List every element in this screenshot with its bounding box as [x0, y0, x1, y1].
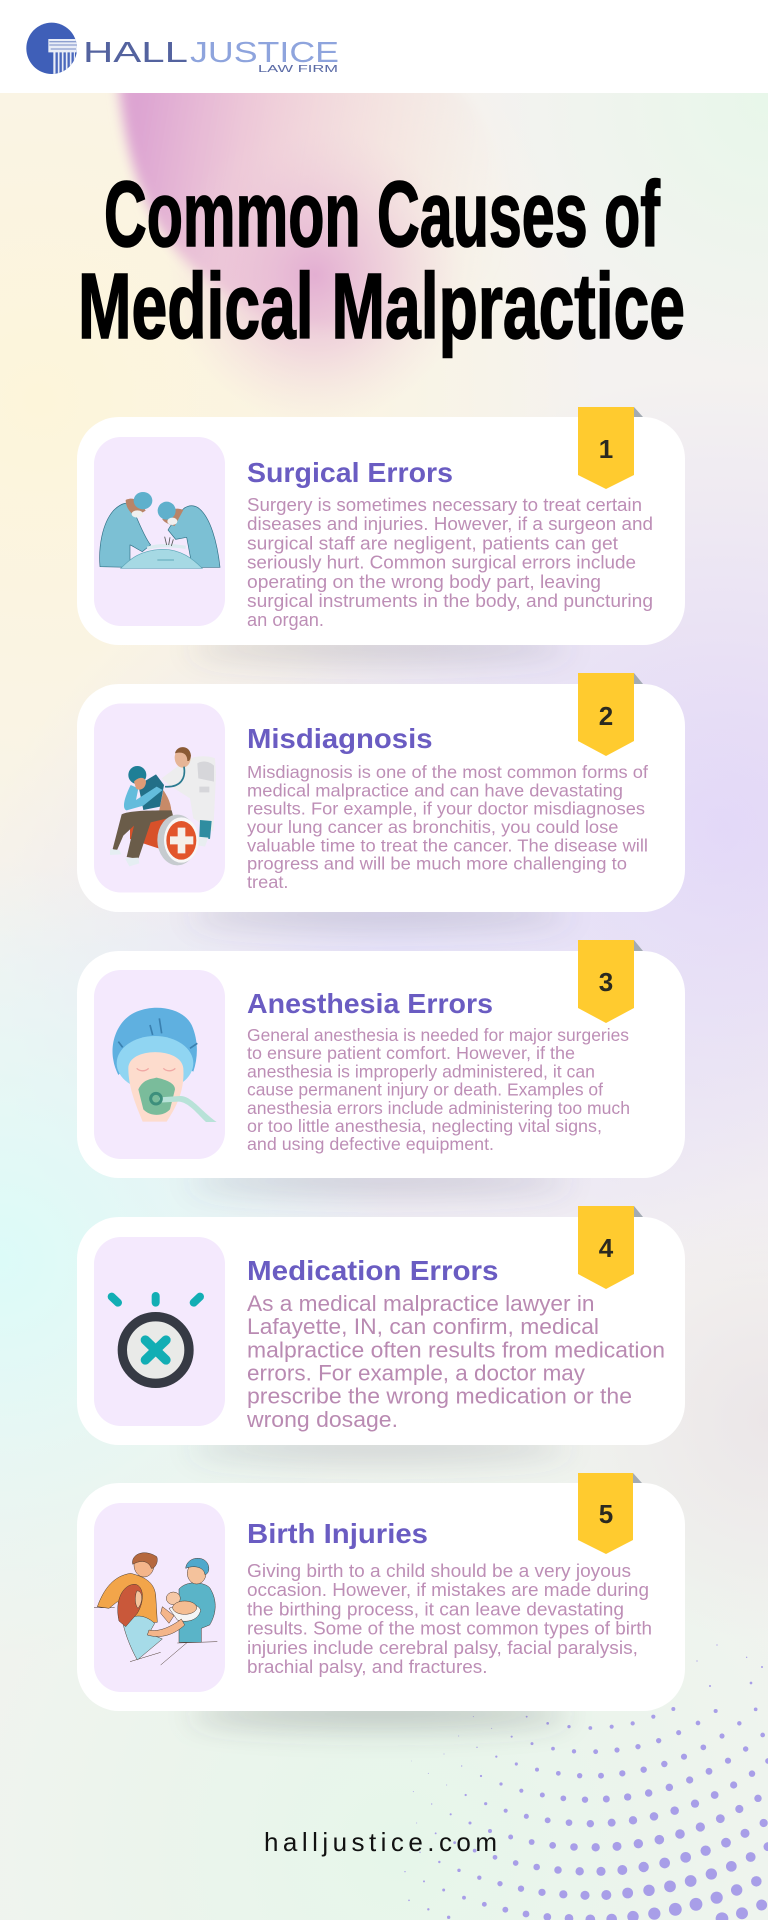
logo: [26, 23, 339, 75]
body text: results. For example, if your doctor misdiagnoses: [247, 799, 645, 819]
number ribbon 2: [578, 673, 643, 756]
body text: Surgery is sometimes necessary to treat certain: [247, 495, 642, 515]
body text: wrong dosage.: [246, 1407, 398, 1432]
body text: the birthing process, it can leave devastating: [247, 1599, 624, 1619]
footer website url: halljustice.com: [264, 1827, 497, 1857]
icon: patient with anesthesia mask: [113, 1008, 217, 1122]
section heading: Misdiagnosis: [247, 723, 432, 754]
number ribbon 5: [578, 1473, 642, 1554]
body text: [247, 1025, 630, 1154]
number ribbon 1: [578, 407, 643, 489]
number ribbon 3: 3: [599, 967, 613, 997]
body text: cause permanent injury or death. Examples of: [247, 1080, 603, 1100]
number ribbon 2: 2: [599, 701, 613, 731]
body text: errors. For example, a doctor may: [247, 1361, 585, 1386]
body text: medical malpractice and can have devastating: [247, 780, 623, 800]
body text: General anesthesia is needed for major surgeries: [247, 1025, 629, 1045]
body text: [246, 1291, 665, 1432]
section heading: Surgical Errors: [247, 457, 453, 488]
section heading: Birth Injuries: [247, 1518, 428, 1549]
icon: doctor examining patient: [110, 747, 216, 866]
body text: prescribe the wrong medication or the: [247, 1384, 632, 1409]
card 1: surgical errors: [77, 407, 685, 662]
body text: results. Some of the most common types of birth: [247, 1619, 652, 1639]
icon: parents and nurse with newborn: [94, 1553, 217, 1665]
body text: your lung cancer as bronchitis, you could lose: [247, 817, 618, 837]
body text: injuries include cerebral palsy, facial paralysis,: [247, 1638, 638, 1658]
header band with logo: [26, 22, 338, 74]
body text: anesthesia errors include administering too much: [247, 1098, 630, 1118]
body text: treat.: [247, 872, 288, 892]
number ribbon 1: 1: [599, 434, 613, 464]
body text: Giving birth to a child should be a very joyous: [247, 1561, 631, 1581]
body text: As a medical malpractice lawyer in: [247, 1291, 594, 1316]
card 5: birth injuries: [77, 1473, 685, 1728]
body text: Lafayette, IN, can confirm, medical: [247, 1314, 599, 1339]
section heading: Medication Errors: [247, 1255, 498, 1286]
body text: seriously hurt. Common surgical errors include: [247, 553, 636, 573]
body text: surgical staff are negligent, patients can get: [247, 533, 618, 553]
halftone dot pattern: [404, 1639, 768, 1920]
section heading: Anesthesia Errors: [247, 988, 493, 1019]
icon: surgeons: [100, 492, 220, 568]
body text: valuable time to treat the cancer. The disease will: [247, 835, 648, 855]
body text: brachial palsy, and fractures.: [247, 1657, 488, 1677]
body text: to ensure patient comfort. However, if the: [247, 1043, 575, 1063]
body text: an organ.: [247, 610, 324, 630]
logo emblem: pillar in circle: [26, 23, 80, 75]
body text: surgical instruments in the body, and puncturing: [247, 591, 653, 611]
logo: LAW FIRM: [258, 63, 338, 75]
body text: malpractice often results from medication: [247, 1337, 665, 1362]
body text: [247, 1561, 652, 1677]
body text: [247, 762, 648, 892]
number ribbon 5: 5: [599, 1499, 613, 1529]
body text: [247, 495, 653, 630]
body text: or too little anesthesia, neglecting vital signs,: [247, 1116, 602, 1136]
logo: JUSTICE: [190, 37, 339, 69]
body text: Misdiagnosis is one of the most common forms of: [247, 762, 648, 782]
card 2: misdiagnosis: [77, 673, 685, 929]
body text: anesthesia is improperly administered, it can: [247, 1061, 595, 1081]
icon: medication error X: [112, 1296, 200, 1383]
number ribbon 4: 4: [599, 1233, 614, 1263]
logo wordmark: HALL: [83, 37, 188, 69]
card 4: medication errors: [77, 1206, 685, 1462]
body text: diseases and injuries. However, if a surgeon and: [247, 514, 653, 534]
body text: operating on the wrong body part, leaving: [247, 572, 601, 592]
body text: and using defective equipment.: [247, 1134, 494, 1154]
number ribbon 3: [578, 940, 643, 1023]
body text: occasion. However, if mistakes are made during: [247, 1580, 649, 1600]
body text: progress and will be much more challenging to: [247, 854, 627, 874]
number ribbon 4: [578, 1206, 643, 1289]
title: [78, 162, 685, 358]
card 3: anesthesia errors: [77, 940, 685, 1195]
